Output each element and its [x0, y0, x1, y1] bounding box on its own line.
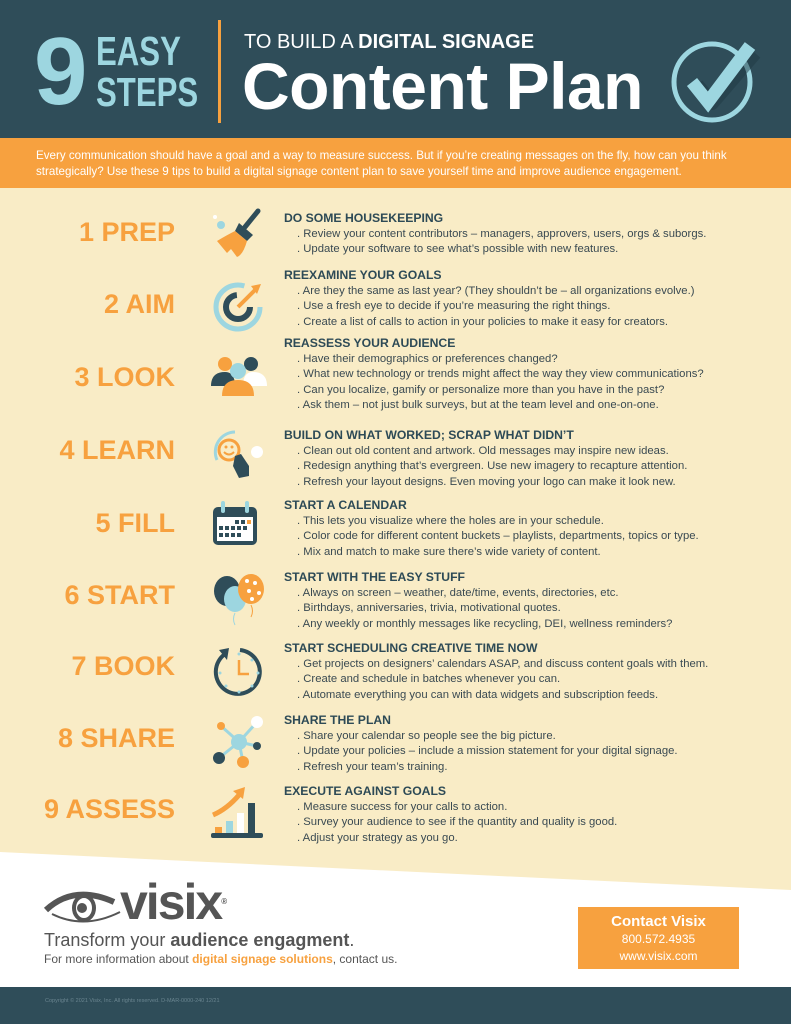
label: 6 START: [64, 580, 175, 610]
text: START SCHEDULING CREATIVE TIME NOW: [284, 641, 537, 655]
footer: Copyright © 2021 Visix, Inc. All rights reserved. D-MAR-0000-240 12/21: [45, 998, 220, 1004]
text: . Have their demographics or preferences changed?: [297, 353, 558, 365]
text: SHARE THE PLAN: [284, 713, 391, 727]
label: 1 PREP: [79, 217, 175, 247]
footer: [0, 987, 791, 1024]
title easy steps: [96, 28, 198, 115]
text: . Refresh your layout designs. Even moving your logo can make it look new.: [297, 476, 676, 488]
step 4: [59, 428, 687, 488]
icon: network: [213, 716, 263, 768]
text: [284, 428, 687, 488]
main title: Content Plan: [242, 49, 643, 123]
header band: [0, 0, 791, 138]
contact box: 800.572.4935: [622, 932, 695, 946]
label: 8 SHARE: [58, 723, 175, 753]
icon: target: [214, 282, 262, 332]
text: START A CALENDAR: [284, 498, 407, 512]
text: . Birthdays, anniversaries, trivia, motivational quotes.: [297, 602, 561, 614]
text: [284, 570, 672, 630]
text: DO SOME HOUSEKEEPING: [284, 211, 443, 225]
title easy steps: EASY: [96, 28, 181, 74]
icon: check circle: [672, 42, 760, 122]
text: . Update your policies – include a mission statement for your digital signage.: [297, 745, 678, 757]
contact box: www.visix.com: [619, 949, 698, 963]
text: [284, 641, 708, 701]
intro orange band: [0, 138, 791, 188]
step 2: [104, 268, 694, 332]
text: . This lets you visualize where the holes are in your schedule.: [297, 515, 604, 527]
text: . Adjust your strategy as you go.: [297, 832, 458, 844]
step 7: [71, 641, 708, 701]
text: . Get projects on designers’ calendars ASAP, and discuss content goals with them.: [297, 658, 708, 670]
text: [284, 498, 699, 558]
text: BUILD ON WHAT WORKED; SCRAP WHAT DIDN’T: [284, 428, 574, 442]
label: 2 AIM: [104, 289, 175, 319]
text: . Redesign anything that’s evergreen. Use new imagery to recapture attention.: [297, 460, 687, 472]
text: . Color code for different content buckets – playlists, departments, topics or type.: [297, 530, 699, 542]
cream background: [0, 188, 791, 890]
step 5: [96, 498, 699, 558]
step 8: [58, 713, 678, 773]
logo: visix: [44, 874, 227, 930]
text: . Survey your audience to see if the quantity and quality is good.: [297, 816, 617, 828]
text: . Share your calendar so people see the big picture.: [297, 730, 556, 742]
subtitle: TO BUILD A DIGITAL SIGNAGE: [244, 31, 534, 53]
step 6: [64, 570, 672, 630]
label: 5 FILL: [96, 508, 175, 538]
step 3: [74, 336, 704, 411]
tagline: Transform your audience engagment.: [44, 930, 354, 950]
text: . Always on screen – weather, date/time, events, directories, etc.: [297, 587, 618, 599]
intro orange band: Every communication should have a goal and a way to measure success. But if you’re creating messages on the fly, how can you think: [36, 149, 727, 162]
text: . Create a list of calls to action in your policies to make it easy for creators.: [297, 316, 668, 328]
text: [284, 336, 704, 411]
text: [284, 713, 678, 773]
text: EXECUTE AGAINST GOALS: [284, 784, 446, 798]
text: [284, 268, 694, 328]
text: . Clean out old content and artwork. Old messages may inspire new ideas.: [297, 445, 669, 457]
label: 7 BOOK: [71, 651, 175, 681]
icon: calendar: [213, 501, 257, 545]
icon: broom: [213, 208, 260, 257]
icon: growth chart: [211, 787, 263, 838]
text: . Refresh your team’s training.: [297, 761, 447, 773]
label: 9 ASSESS: [44, 794, 175, 824]
text: . Can you localize, gamify or personalize more than you have in the past?: [297, 384, 664, 396]
title easy steps: STEPS: [96, 69, 198, 115]
contact box: Contact Visix: [611, 913, 706, 930]
text: . Measure success for your calls to action.: [297, 801, 507, 813]
text: [284, 784, 617, 844]
text: . Update your software to see what’s possible with new features.: [297, 243, 618, 255]
text: . Create and schedule in batches whenever you can.: [297, 673, 560, 685]
icon: clock: [214, 648, 262, 696]
text: START WITH THE EASY STUFF: [284, 570, 465, 584]
label: 4 LEARN: [59, 435, 175, 465]
text: . Mix and match to make sure there’s wide variety of content.: [297, 546, 601, 558]
icon: balloons: [214, 574, 264, 626]
text: . What new technology or trends might affect the way they view communications?: [297, 368, 704, 380]
text: REASSESS YOUR AUDIENCE: [284, 336, 455, 350]
text: . Any weekly or monthly messages like recycling, DEI, wellness reminders?: [297, 618, 672, 630]
info line: For more information about digital signage solutions, contact us.: [44, 952, 397, 966]
text: . Ask them – not just bulk surveys, but at the team level and one-on-one.: [297, 399, 659, 411]
text: . Use a fresh eye to decide if you’re measuring the right things.: [297, 300, 610, 312]
title number 9: 9: [34, 18, 84, 125]
intro orange band: strategically? Use these 9 tips to build a digital signage content plan to save yourself time and improve audience engagement.: [36, 164, 682, 178]
step 1: [79, 208, 706, 257]
text: . Are they the same as last year? (They shouldn’t be – all organizations evolve.): [297, 285, 694, 297]
icon: people: [211, 357, 267, 396]
text: . Automate everything you can with data widgets and subscription feeds.: [297, 689, 658, 701]
text: [284, 211, 706, 255]
label: 3 LOOK: [74, 362, 175, 392]
icon: smiley touch: [214, 430, 263, 478]
divider: [218, 20, 221, 123]
contact box: [578, 907, 739, 969]
text: . Review your content contributors – managers, approvers, users, orgs & suborgs.: [297, 228, 706, 240]
text: REEXAMINE YOUR GOALS: [284, 268, 442, 282]
step 9: [44, 784, 617, 844]
logo: visix: visix®: [120, 874, 225, 930]
